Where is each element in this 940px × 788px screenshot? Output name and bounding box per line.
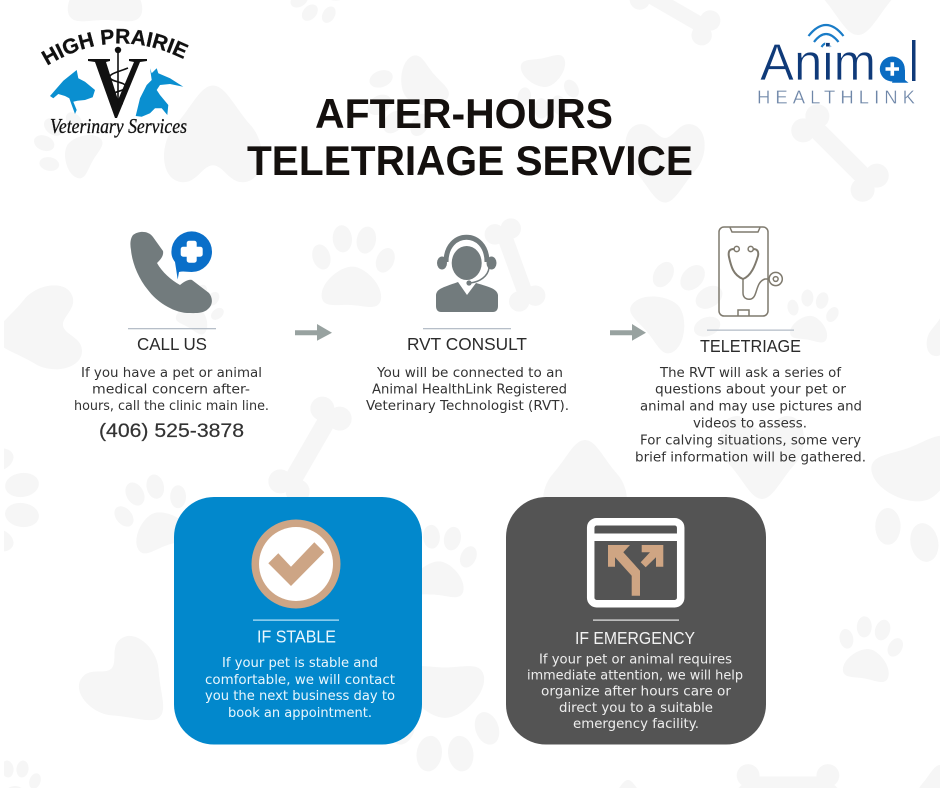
title: AFTER-HOURS	[315, 90, 613, 137]
logo icon: blue horse and cow	[136, 68, 183, 117]
description: questions about your pet or	[655, 382, 847, 398]
divider	[253, 620, 339, 621]
description: If your pet is stable and	[222, 656, 378, 671]
description: Animal HealthLink Registered	[372, 382, 567, 398]
description: If you have a pet or animal	[81, 366, 262, 381]
description	[635, 366, 866, 466]
step: RVT consult	[366, 237, 569, 414]
divider	[128, 328, 216, 329]
description: The RVT will ask a series of	[659, 366, 841, 381]
arrow	[610, 324, 646, 341]
icon: check mark	[252, 520, 340, 608]
divider	[423, 328, 511, 329]
description: you the next business day to	[205, 689, 395, 704]
description: If your pet or animal requires	[539, 652, 732, 668]
logo: High Prairie Veterinary Services	[41, 28, 189, 138]
title: TELETRIAGE SERVICE	[247, 137, 693, 184]
logo wordmark: High Prairie: HIGH PRAIRIE	[41, 28, 189, 66]
description: organize after hours care or	[541, 684, 732, 700]
description	[74, 366, 269, 414]
heading: CALL US	[137, 334, 207, 354]
step: teletriage	[635, 227, 866, 466]
description	[366, 366, 569, 414]
description	[527, 652, 743, 732]
panel: if stable	[174, 497, 422, 744]
icon: diverging road window	[590, 522, 681, 604]
icon: phone with stethoscope	[719, 227, 782, 316]
divider	[593, 620, 679, 621]
description: emergency facility.	[573, 717, 699, 732]
icon: medical chat bubble	[880, 56, 908, 83]
step: call us	[74, 231, 269, 442]
logo icon: blue dog and cat	[50, 70, 95, 114]
description: medical concern after-	[92, 382, 250, 398]
divider	[707, 330, 794, 331]
description: comfortable, we will contact	[205, 673, 395, 688]
description: book an appointment.	[228, 706, 372, 721]
panel: if emergency	[506, 497, 766, 744]
logo wordmark: l	[912, 40, 916, 81]
description: You will be connected to an	[376, 366, 563, 381]
description	[205, 656, 395, 721]
description: Veterinary Technologist (RVT).	[366, 399, 569, 414]
description: For calving situations, some very	[640, 434, 861, 448]
heading: RVT CONSULT	[407, 334, 527, 354]
icon: wifi arcs	[808, 25, 844, 47]
icon: phone with medical bubble	[130, 231, 212, 313]
description: hours, call the clinic main line.	[74, 399, 269, 414]
icon: agent with headset	[436, 237, 498, 312]
logo: Animal HealthLink	[757, 25, 916, 108]
logo wordmark: Anim: Anim	[760, 34, 876, 92]
description: animal and may use pictures and	[640, 400, 862, 414]
heading: IF STABLE	[257, 626, 336, 646]
logo script: Veterinary Services: Veterinary Services	[50, 114, 187, 138]
description: brief information will be gathered.	[635, 450, 866, 466]
logo icon: V with caduceus	[88, 47, 147, 118]
heading: TELETRIAGE	[700, 336, 801, 356]
heading: IF EMERGENCY	[575, 628, 695, 648]
arrow	[295, 324, 332, 341]
description: videos to assess.	[693, 416, 807, 432]
description: immediate attention, we will help	[527, 668, 743, 684]
title	[247, 90, 693, 184]
description: direct you to a suitable	[559, 701, 713, 716]
phone number: (406) 525-3878	[99, 420, 244, 442]
logo wordmark: HEALTHLINK: HEALTHLINK	[757, 86, 916, 108]
